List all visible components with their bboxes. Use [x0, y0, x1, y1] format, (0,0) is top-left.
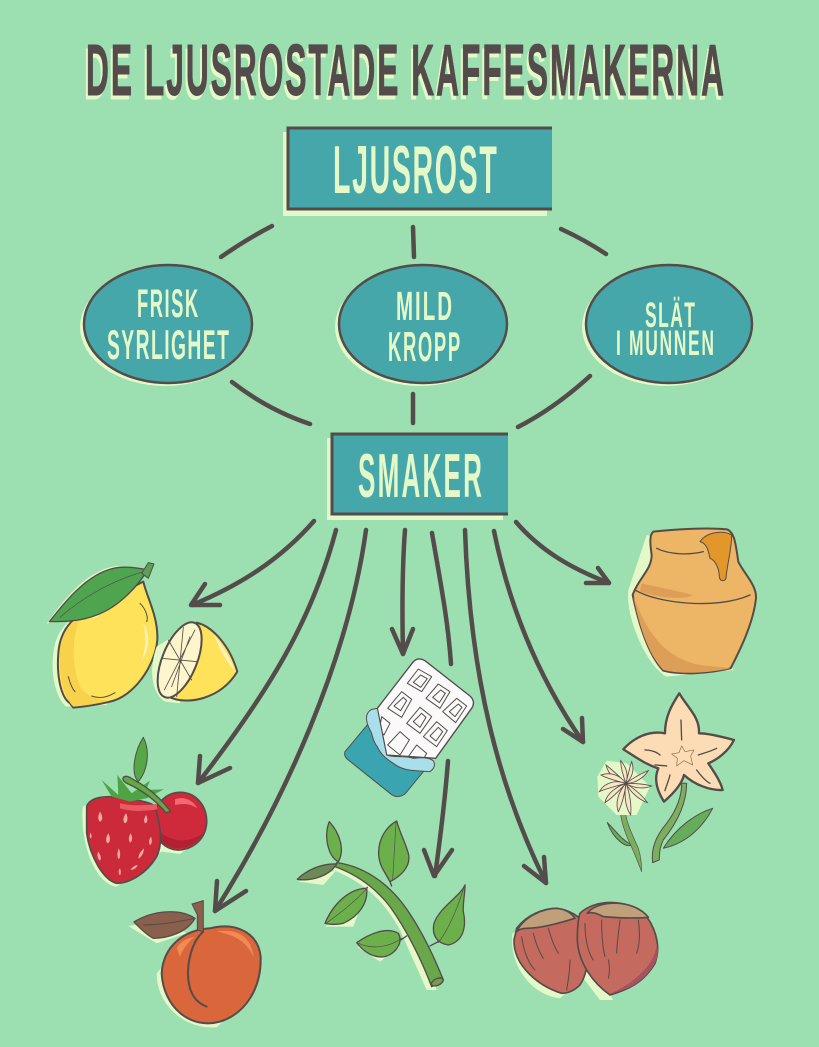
icon: leafy branch	[297, 821, 465, 990]
icon: lemon	[47, 563, 157, 708]
icon: chocolate bar	[345, 659, 473, 796]
arrow: to peach	[215, 530, 366, 911]
ellipse: slät i munnen: SLÄT	[645, 295, 695, 335]
arrow: to lemon	[191, 521, 314, 605]
ellipse: mild kropp: MILD	[396, 283, 452, 329]
ellipse: slät i munnen	[582, 265, 752, 386]
icon: hazelnuts	[512, 902, 658, 1000]
ellipse: frisk syrlighet: FRISK	[137, 281, 198, 326]
icon: strawberry and cherry	[82, 737, 207, 887]
arrow: to flowers	[494, 531, 583, 742]
ellipse: frisk syrlighet	[80, 265, 252, 386]
ellipse: frisk syrlighet: SYRLIGHET	[107, 320, 229, 368]
connectors: top	[221, 226, 606, 257]
ellipse: mild kropp: KROPP	[388, 323, 460, 370]
connectors: bottom	[232, 376, 590, 427]
arrow: to chocolate	[392, 530, 413, 654]
arrow: to honey pot	[516, 522, 609, 583]
icon: honey pot	[628, 529, 756, 677]
box: smaker: SMAKER	[358, 442, 482, 511]
box: smaker	[327, 433, 508, 520]
box: ljusrost: LJUSROST	[333, 133, 497, 209]
arrow: to leaves	[424, 533, 452, 876]
icon: flowers	[597, 693, 734, 872]
icon: peach	[128, 901, 261, 1027]
arrow: to berries	[198, 530, 336, 783]
ellipse: slät i munnen: I MUNNEN	[616, 323, 714, 363]
ellipse: mild kropp	[335, 265, 507, 386]
title: DE LJUSROSTADE KAFFESMAKERNA	[86, 30, 724, 111]
icon: lemon half	[149, 616, 237, 704]
title: DE LJUSROSTADE KAFFESMAKERNA	[84, 34, 722, 115]
arrow: to hazelnuts	[465, 530, 546, 883]
box: ljusrost	[283, 127, 552, 216]
